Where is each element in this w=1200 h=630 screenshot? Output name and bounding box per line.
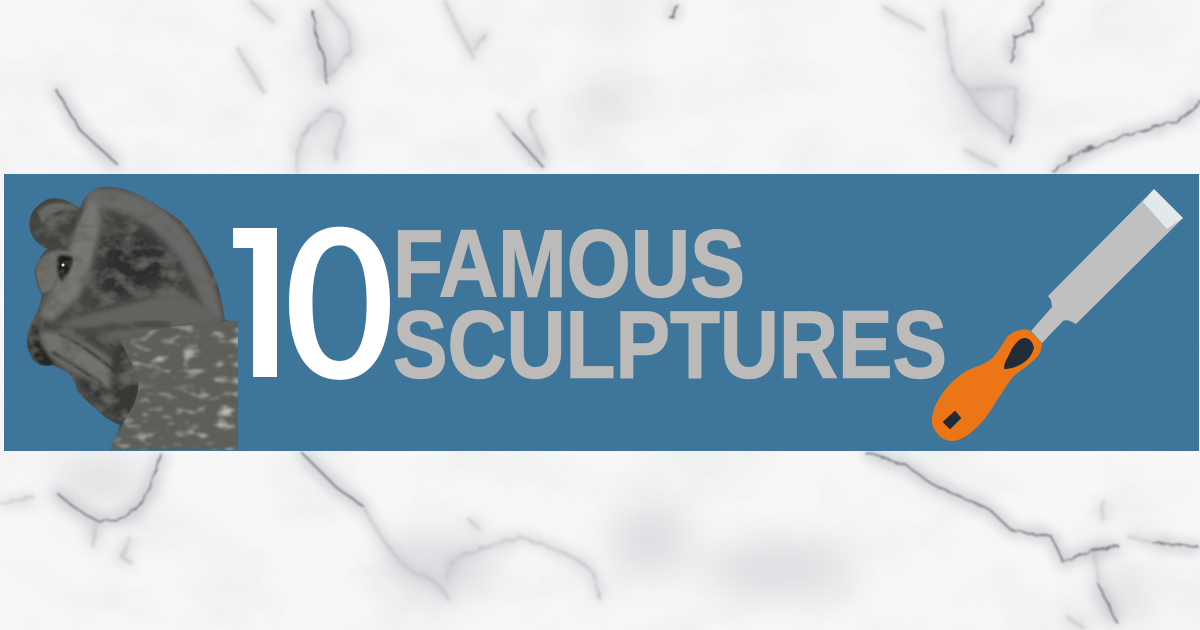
digit one: 1 <box>197 191 312 421</box>
heading: FAMOUS SCULPTURES: FAMOUS <box>393 210 745 318</box>
rock base <box>108 321 240 452</box>
banner: blue band <box>4 174 1199 451</box>
icon: chisel <box>932 189 1183 441</box>
chisel tip <box>1143 189 1183 229</box>
digit zero: 0 <box>279 139 400 437</box>
heading: FAMOUS SCULPTURES <box>393 210 947 398</box>
digit one flag <box>233 228 277 248</box>
chisel end cap <box>944 412 960 428</box>
statue body <box>20 180 245 455</box>
big number 10 <box>233 226 390 380</box>
chisel handle <box>932 329 1042 441</box>
chisel grip <box>1004 338 1034 369</box>
heading: FAMOUS SCULPTURES: SCULPTURES <box>393 292 947 398</box>
sculpture: The Thinker <box>20 180 245 455</box>
chisel blade and neck <box>1031 189 1183 343</box>
